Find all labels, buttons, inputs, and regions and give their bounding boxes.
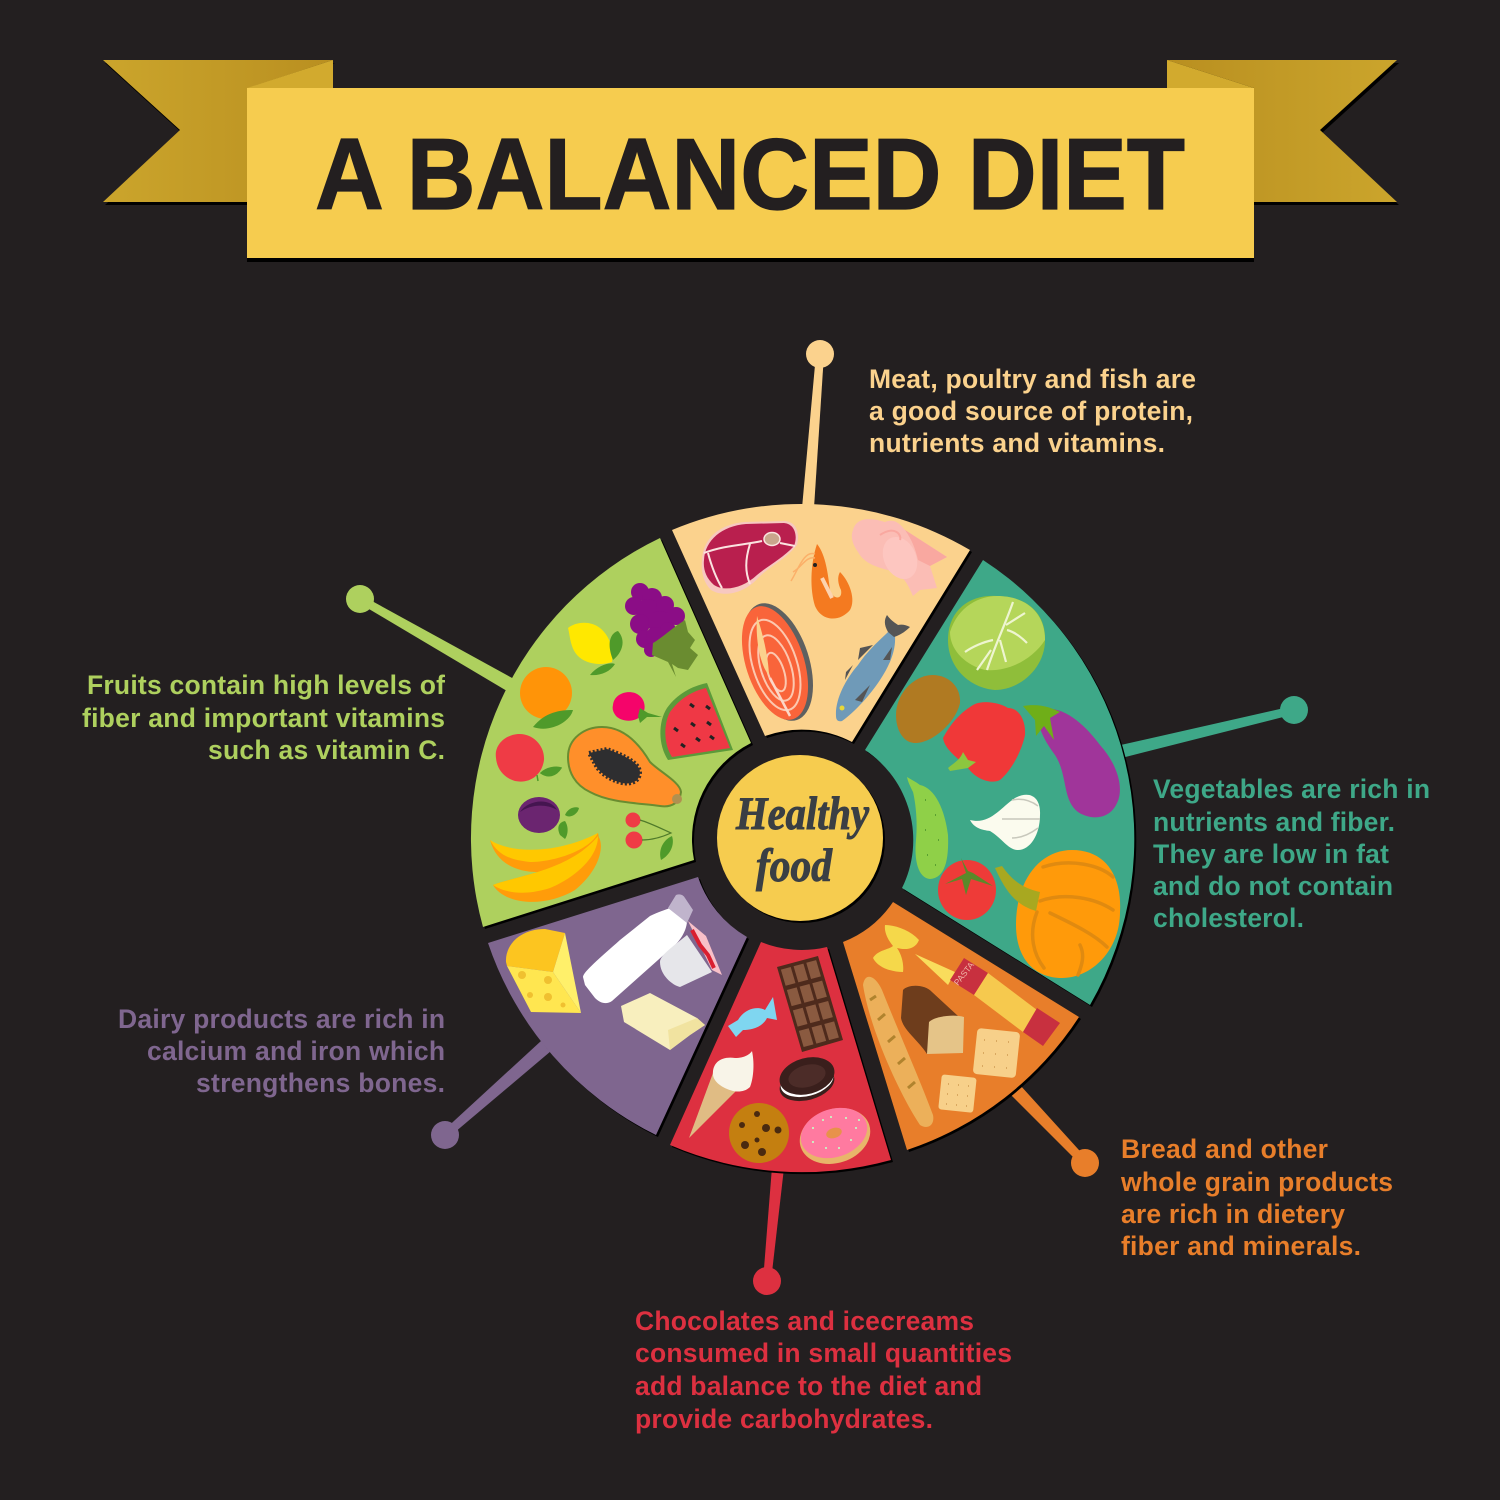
icon: grapes (625, 583, 698, 677)
panel: sweets wedge (670, 942, 891, 1173)
icon: baguette (863, 977, 933, 1127)
hub circle (717, 755, 883, 921)
icon: garlic (970, 795, 1040, 850)
icon: chocolate chip cookie (729, 1103, 789, 1163)
icon: large cracker (973, 1028, 1020, 1078)
text: vegetables: Vegetables are rich in (1153, 774, 1430, 804)
icon: milk bottle (583, 894, 693, 1003)
icon: candy (728, 997, 777, 1037)
panel: meat wedge (672, 504, 970, 742)
text: bread: fiber and minerals. (1121, 1231, 1361, 1261)
icon: donut (792, 1099, 878, 1173)
ribbon main band (247, 88, 1254, 262)
ribbon left tail (103, 60, 335, 205)
icon: cabbage (948, 596, 1045, 690)
text: sweets: add balance to the diet and (635, 1371, 982, 1401)
icon: plum (518, 797, 579, 839)
icon: spaghetti pack: PASTA (952, 960, 976, 987)
icon: shrimp (791, 544, 852, 619)
text: fruit: Fruits contain high levels of (87, 670, 445, 700)
icon: cherries (626, 812, 673, 860)
text: bread (1120, 1134, 1393, 1261)
text: fruit: such as vitamin C. (208, 735, 445, 765)
panel: bread wedge (843, 902, 1079, 1150)
panel: vegetables wedge (865, 560, 1134, 1005)
text: sweets: consumed in small quantities (635, 1338, 1012, 1368)
title: A BALANCED DIET (315, 119, 1185, 231)
text: fruit (82, 670, 445, 765)
icon: pumpkin (995, 850, 1120, 978)
icon: steak (702, 521, 798, 594)
text: fruit: fiber and important vitamins (82, 703, 445, 733)
text: meat: nutrients and vitamins. (869, 428, 1165, 458)
text: meat: a good source of protein, (869, 396, 1193, 426)
banner: title ribbon (103, 60, 1399, 262)
icon: bananas (490, 833, 601, 902)
hub label (735, 788, 869, 892)
icon: bread loaf (901, 986, 964, 1054)
text: vegetables: cholesterol. (1153, 903, 1304, 933)
icon: yogurt cup (660, 921, 722, 987)
icon: sandwich cookie (775, 1051, 839, 1107)
text: vegetables: They are low in fat (1153, 839, 1389, 869)
text: vegetables: nutrients and fiber. (1153, 807, 1395, 837)
text: sweets: provide carbohydrates. (635, 1404, 933, 1434)
text: dairy: strengthens bones. (196, 1068, 445, 1098)
icon: fish (836, 615, 910, 721)
text: dairy: Dairy products are rich in (118, 1004, 445, 1034)
icon: apple (496, 734, 561, 782)
connector: vegetables (1118, 696, 1308, 758)
icon: red pepper (943, 702, 1025, 782)
text: dairy: calcium and iron which (147, 1036, 445, 1066)
icon: raspberry (613, 692, 662, 723)
icon: butter (621, 993, 705, 1050)
panel: fruit wedge (471, 538, 751, 927)
wedge shape (488, 877, 747, 1135)
text: sweets: Chocolates and icecreams (635, 1306, 974, 1336)
connector: fruit (346, 585, 514, 691)
connector: sweets (753, 1167, 784, 1295)
icon: potato (896, 675, 960, 743)
text: meat (869, 364, 1196, 458)
icon: chicken (852, 519, 947, 596)
wedge shape (865, 560, 1134, 1005)
wedge shape (670, 942, 891, 1172)
text: bread: whole grain products (1120, 1167, 1393, 1197)
wedge shape (471, 538, 751, 927)
icon: ice cream cone (689, 1051, 753, 1138)
icon: lemon (568, 623, 623, 675)
icon: pasta bow (873, 925, 919, 972)
text: vegetables (1153, 774, 1430, 933)
text: bread: are rich in dietery (1121, 1199, 1345, 1229)
text: vegetables: and do not contain (1153, 871, 1393, 901)
icon: eggplant (1023, 705, 1120, 817)
connector: meat (802, 340, 834, 508)
text: dairy (118, 1004, 445, 1098)
panel: dairy wedge (488, 877, 747, 1135)
text: bread: Bread and other (1121, 1134, 1328, 1164)
icon: watermelon (660, 683, 733, 760)
icon: papaya (568, 727, 682, 806)
icon: cheese (506, 929, 581, 1013)
text: meat: Meat, poultry and fish are (869, 364, 1196, 394)
icon: salmon steak (729, 594, 826, 730)
hub label: food (756, 840, 833, 892)
icon: orange (520, 667, 573, 729)
icon: cucumber (907, 777, 948, 879)
connector: dairy (431, 1041, 551, 1149)
hub label: Healthy (735, 788, 869, 840)
wedge shape (843, 902, 1079, 1150)
icon: spaghetti pack (915, 954, 1060, 1046)
icon: chocolate bar (777, 956, 843, 1052)
icon: tomato (938, 858, 996, 920)
icon: small cracker (938, 1074, 977, 1113)
center hub (717, 755, 883, 921)
ribbon right tail (1167, 60, 1399, 205)
text: sweets (635, 1306, 1012, 1434)
connector: bread (1010, 1085, 1099, 1177)
wedge shape (672, 504, 970, 742)
